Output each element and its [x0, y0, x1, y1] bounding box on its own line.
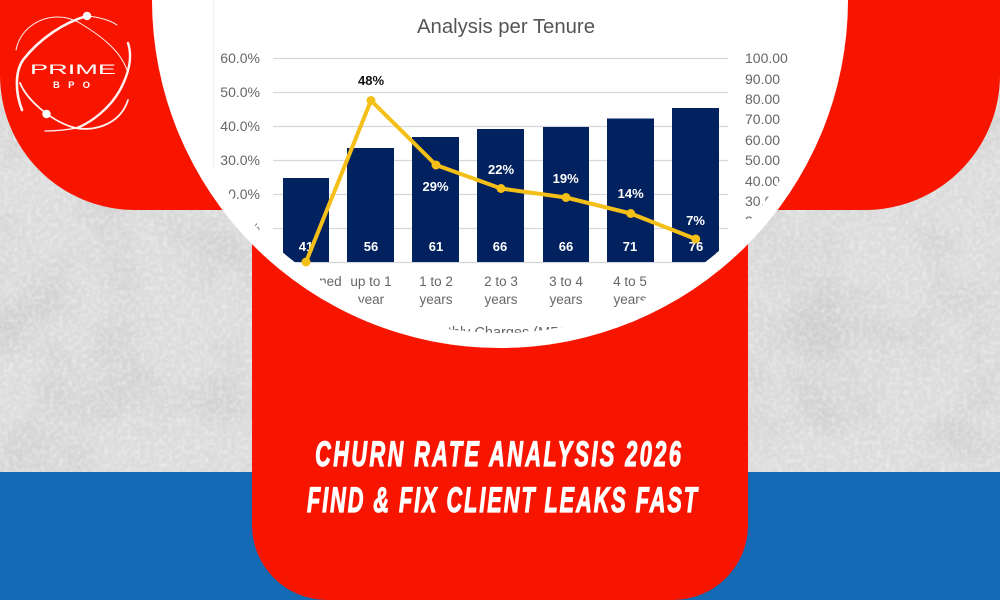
white circular lens — [152, 0, 848, 348]
category labels: years — [484, 292, 518, 307]
axis title: Monthly Charges (MBP) — [420, 325, 574, 341]
category labels: years — [679, 292, 713, 307]
right axis labels — [745, 50, 788, 229]
left axis labels — [220, 50, 260, 236]
line percentages: 7% — [686, 213, 705, 228]
chart title: Analysis per Tenure — [417, 16, 595, 38]
left axis labels: 60.0% — [220, 50, 260, 66]
logo subtitle: BPO — [53, 80, 90, 91]
red central column — [252, 100, 748, 600]
right axis labels: 30.00 — [745, 193, 780, 209]
line percentages — [358, 73, 705, 228]
right axis labels: 40.00 — [745, 173, 780, 189]
bar values: 66 — [559, 239, 573, 254]
line percentages: 22% — [488, 162, 514, 177]
bar values: 56 — [364, 239, 378, 254]
line percentages: 29% — [422, 179, 449, 194]
right axis labels: 90.00 — [745, 71, 780, 87]
line percentages: 19% — [553, 171, 579, 186]
category labels: 4 to 5 — [613, 274, 647, 289]
background: grey concrete texture — [0, 0, 1000, 472]
category labels — [318, 276, 646, 307]
right axis labels: 20.00 — [745, 213, 780, 229]
headline — [307, 436, 699, 520]
left axis labels: 20.0% — [220, 186, 260, 202]
logo orbit rings — [16, 16, 130, 131]
category labels: 1 to 2 — [419, 274, 453, 289]
right axis labels: 50.00 — [745, 152, 780, 168]
category labels: 3 to 4 — [549, 274, 583, 289]
right axis labels: 60.00 — [745, 132, 780, 148]
right axis labels: 70.00 — [745, 111, 780, 127]
right axis labels: 80.00 — [745, 91, 780, 107]
red header shape with rounded corners — [0, 0, 1000, 210]
logo wordmark: PRIME — [30, 61, 116, 77]
category labels: year — [358, 292, 385, 307]
category labels: 2 to 3 — [484, 274, 518, 289]
logo dots — [83, 12, 91, 20]
chart image edge — [213, 0, 214, 170]
left axis labels: 40.0% — [220, 118, 260, 134]
category labels: years — [419, 292, 453, 307]
bars — [283, 108, 719, 262]
background: blue band — [0, 472, 1000, 600]
headline line 2: FIND & FIX CLIENT LEAKS FAST — [307, 482, 699, 520]
gridlines — [273, 58, 728, 262]
category labels: years — [549, 292, 583, 307]
headline line 1: CHURN RATE ANALYSIS 2026 — [315, 436, 681, 474]
category labels: 5+ — [688, 274, 704, 289]
line percentages: 48% — [358, 73, 384, 88]
yellow churn line — [302, 96, 700, 266]
line percentages: 14% — [618, 186, 644, 201]
bar values — [298, 242, 703, 251]
category labels: years — [613, 292, 647, 307]
bar values: 71 — [623, 239, 637, 254]
bar values: 76 — [689, 239, 703, 254]
left axis labels: 10.0% — [220, 220, 260, 236]
bar values: 66 — [493, 239, 507, 254]
bar values: 61 — [429, 239, 443, 254]
category labels: Unassigned — [270, 274, 342, 289]
logo: Prime BPO — [16, 12, 130, 131]
left axis labels: 30.0% — [220, 152, 260, 168]
right axis labels: 100.00 — [745, 50, 788, 66]
chart: analysis per tenure — [214, 0, 788, 341]
category labels: up to 1 — [350, 274, 392, 289]
bar values: 41 — [299, 239, 313, 254]
left axis labels: 50.0% — [220, 84, 260, 100]
